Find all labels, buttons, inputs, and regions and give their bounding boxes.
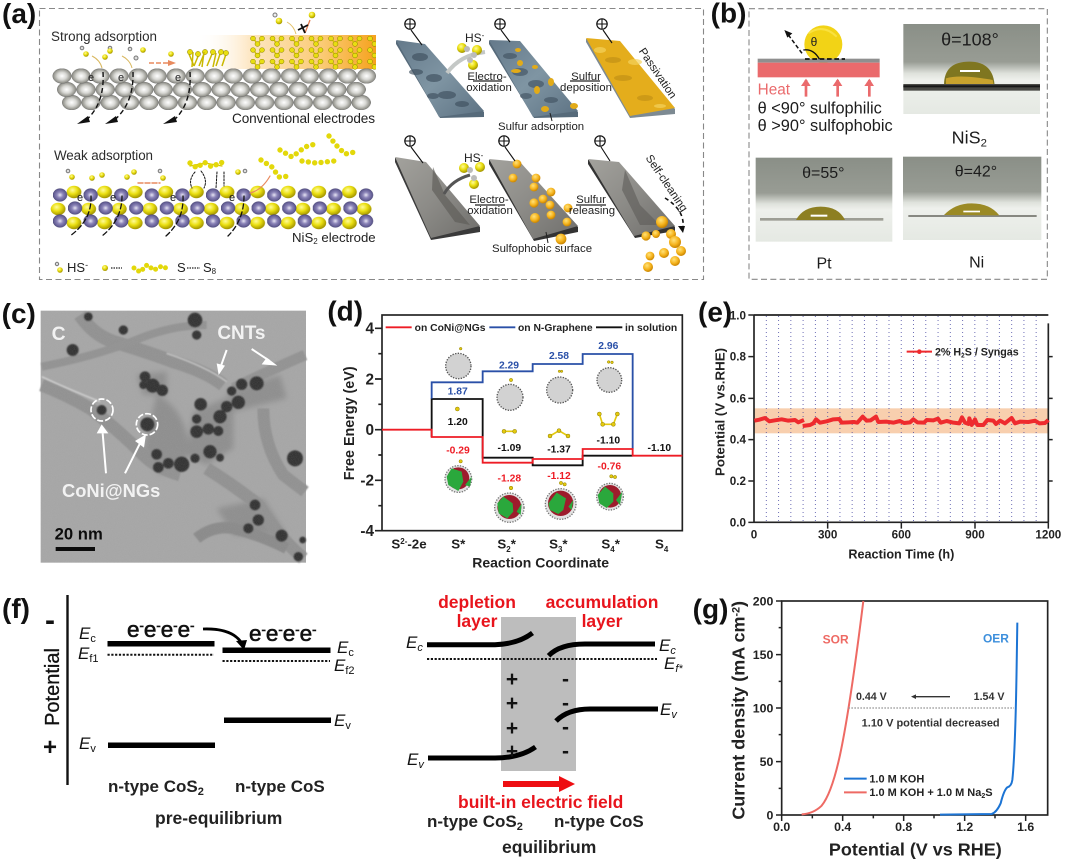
labels bottom row of plates <box>464 151 690 255</box>
axes e: 300 <box>818 528 837 541</box>
adsorbed HS- and electron paths, conventional: e <box>175 72 181 84</box>
x axis labels d: 4 <box>664 545 669 554</box>
legend g: 1.0 M KOH + 1.0 M Na <box>869 787 981 799</box>
y axis title g: Current density (mA cm <box>729 616 749 820</box>
labels bottom row of plates: Electro- <box>469 194 509 206</box>
legend g: 1.0 M KOH <box>869 773 924 785</box>
x axis title e: Reaction Time (h) <box>848 548 954 562</box>
red energy values <box>446 446 621 484</box>
HS- adsorbing and blocked <box>273 12 315 34</box>
panel label (f): (f) <box>2 593 30 624</box>
red layer labels: accumulation <box>546 592 658 612</box>
x axis labels d: S <box>655 537 664 552</box>
level labels right diagram: E <box>659 636 670 655</box>
electrons left and right: - <box>173 618 178 633</box>
potential annotation: 1.54 V <box>974 691 1005 703</box>
potential annotation <box>848 691 1014 729</box>
space charges: - <box>562 716 569 739</box>
scale bar: 20 nm <box>55 524 103 543</box>
material labels left: n-type CoS <box>108 777 198 796</box>
level labels left diagram: E <box>337 638 348 657</box>
electrons left and right: e <box>249 621 262 646</box>
legend a: 8 <box>212 267 217 276</box>
panel label (c): (c) <box>2 298 36 329</box>
level labels left diagram <box>78 624 355 755</box>
axes g <box>753 595 1048 834</box>
built-in field label: built-in electric field <box>458 792 623 812</box>
black energy values: -1.10 <box>648 443 671 454</box>
sulfur chains released <box>66 136 355 236</box>
axes d: -4 <box>360 523 374 540</box>
nanoparticle dashed circles <box>91 399 158 435</box>
axes g: 0.8 <box>895 820 912 834</box>
electrons left and right: - <box>190 618 194 633</box>
blue energy values: 2.58 <box>549 351 569 362</box>
axes d: 0 <box>365 422 374 439</box>
panel: (d) free energy diagram <box>327 296 682 570</box>
space charges: + <box>506 668 518 691</box>
potential axis: - <box>45 604 55 637</box>
space charges <box>506 668 569 763</box>
labels top row of plates: Sulfur <box>571 71 601 83</box>
built-in field arrow <box>503 776 575 792</box>
sulfophilic/sulfophobic definitions: θ <90° sulfophilic <box>758 99 882 117</box>
axes g: 0.4 <box>834 820 851 834</box>
electrons left and right: e <box>300 621 312 646</box>
legend a: S <box>177 260 186 275</box>
sulfur chains released: e <box>170 192 176 204</box>
label: NiS2 electrode: electrode <box>318 230 376 245</box>
axes e: 0.4 <box>730 434 747 447</box>
x axis labels d: 3 <box>558 545 563 554</box>
material labels right: 2 <box>517 821 523 833</box>
adsorbed sulfur atoms and chains <box>455 347 619 490</box>
axes g: 1.2 <box>956 820 973 834</box>
x axis labels d: S <box>601 537 610 552</box>
x axis labels d: S <box>391 537 400 552</box>
level labels left diagram: E <box>79 734 90 753</box>
legend a: HS <box>67 260 85 275</box>
axes e: 900 <box>965 528 985 541</box>
x axis labels d: * <box>511 537 517 552</box>
electrons left and right: e <box>178 617 190 642</box>
axes e: 600 <box>892 528 911 541</box>
electrons left and right <box>127 617 316 646</box>
stability band <box>754 408 1048 433</box>
level labels right diagram: v <box>418 759 425 771</box>
legend e: S / Syngas <box>965 347 1019 359</box>
electrons left and right: - <box>278 622 283 637</box>
label C: C <box>52 324 66 345</box>
red energy values: -1.28 <box>498 473 521 484</box>
axes g: 150 <box>753 648 773 662</box>
legend e: 2 <box>961 353 965 360</box>
electrons left and right: e <box>161 617 173 642</box>
axes g: 0.0 <box>773 820 790 834</box>
NiS2 electrode atoms <box>50 186 374 230</box>
axes e: 0.8 <box>730 351 747 364</box>
panel: (a) adsorption comparison <box>2 0 704 280</box>
caption pre-equilibrium: pre-equilibrium <box>155 808 282 828</box>
SOR curve <box>802 601 863 814</box>
black energy values: 1.20 <box>448 417 468 428</box>
panel: (b) contact angle <box>711 0 1047 279</box>
Fermi level dotted <box>427 658 657 660</box>
x axis labels d: * <box>615 537 621 552</box>
panel: (c) TEM image <box>2 298 306 563</box>
axes d: 2 <box>365 371 374 388</box>
metal atom rows: conventional electrode <box>52 68 376 110</box>
axes g: 100 <box>753 701 773 715</box>
level labels left diagram: f2 <box>345 665 355 677</box>
labels bottom row of plates: HS <box>464 151 481 165</box>
caption equilibrium: equilibrium <box>502 837 596 857</box>
label Pt: Pt <box>816 256 832 273</box>
level labels left diagram: E <box>78 644 89 663</box>
panel label (g): (g) <box>693 593 728 624</box>
legend g: S <box>985 787 993 799</box>
potential trace <box>754 417 1048 426</box>
space charges: + <box>506 692 518 715</box>
adsorbed HS- and electron paths, conventional <box>77 46 216 124</box>
heading: strong adsorption: Strong adsorption <box>51 29 157 44</box>
axes e: 1.0 <box>730 309 746 322</box>
legend e <box>907 347 1019 360</box>
label NiS2: 2 <box>981 138 987 150</box>
material labels right <box>427 812 644 833</box>
x axis labels d: S* <box>451 537 466 552</box>
label CoNi@NGs with arrows: CoNi@NGs <box>62 480 160 501</box>
legend g <box>844 773 993 800</box>
panel label (e): (e) <box>698 296 732 327</box>
red energy values: -0.29 <box>446 446 470 457</box>
space charges: - <box>562 692 569 715</box>
heated droplet diagram: θ <box>811 35 818 49</box>
labels bottom row of plates: oxidation <box>467 205 513 217</box>
legend d: in solution <box>625 323 677 334</box>
orange sulfur passivation layer <box>187 35 376 70</box>
x axis title d: Reaction Coordinate <box>472 554 609 570</box>
label CNTs with arrows: CNTs <box>217 323 266 344</box>
photo: NiS2 droplet: θ=108° <box>941 29 999 49</box>
label Ni: Ni <box>969 254 984 271</box>
y axis title d: Free Energy (eV) <box>342 366 358 480</box>
red energy values: -0.76 <box>598 462 621 473</box>
level labels left diagram: v <box>345 720 351 732</box>
CoNi graphene cluster models <box>445 466 623 522</box>
labels bottom row of plates: Sulfur <box>576 194 606 206</box>
y axis title g: ) <box>729 601 749 607</box>
labels top row of plates: HS <box>465 31 482 45</box>
level labels left diagram: E <box>334 711 345 730</box>
energy step lines <box>382 354 682 465</box>
black energy values: -1.10 <box>597 435 620 446</box>
material labels left: n-type CoS <box>235 777 325 796</box>
legend g: 2 <box>981 793 985 800</box>
red energy values: -1.12 <box>547 471 571 482</box>
potential axis <box>42 595 68 785</box>
OER curve <box>940 623 1017 815</box>
label CNTs with arrows <box>217 323 277 375</box>
legend d <box>386 323 677 334</box>
electrons left and right: e <box>127 617 140 642</box>
labels top row of plates: deposition <box>560 82 612 94</box>
labels bottom row of plates: releasing <box>569 205 615 217</box>
sulfophilic/sulfophobic definitions: θ >90° sulfophobic <box>758 117 893 135</box>
sulfophilic/sulfophobic definitions <box>758 99 893 135</box>
axes d: -2 <box>360 473 374 490</box>
photo: Ni droplet: θ=42° <box>955 164 997 181</box>
panel: (g) polarization curves <box>693 593 1048 860</box>
label: conventional electrodes: Conventional electrodes <box>232 111 375 126</box>
sulfur chains released: e <box>229 192 235 204</box>
labels bottom row of plates: Self-cleaning <box>643 153 690 214</box>
potential axis: + <box>43 734 57 761</box>
photo: Pt droplet <box>756 158 892 242</box>
blue energy values <box>448 341 619 397</box>
level labels right diagram: E <box>660 700 671 719</box>
photo: NiS2 droplet <box>903 24 1040 114</box>
legend a: - <box>85 260 88 270</box>
level labels left diagram: E <box>79 624 90 643</box>
labels top row of plates: - <box>482 31 485 40</box>
pre-equilibrium levels <box>108 629 331 748</box>
level labels left diagram: c <box>90 633 96 645</box>
panel: (f) band diagrams <box>2 592 683 857</box>
label CoNi@NGs with arrows <box>62 424 160 501</box>
x axis labels d: 4 <box>610 545 615 554</box>
bent bands <box>427 633 658 758</box>
label: NiS2 electrode: NiS <box>292 230 313 245</box>
axes e <box>730 309 1061 541</box>
material labels right: n-type CoS <box>554 812 644 831</box>
level labels right diagram: E <box>664 654 675 673</box>
x axis labels d: S <box>497 537 506 552</box>
axes g: 1.6 <box>1017 820 1034 834</box>
space charges: + <box>506 740 518 763</box>
legend a <box>55 260 217 276</box>
labels top row of plates: Sulfur adsorption <box>498 121 584 133</box>
red layer labels: depletion <box>438 592 516 612</box>
level labels right diagram: c <box>417 642 423 654</box>
blue energy values: 2.96 <box>598 341 619 352</box>
dashed frame a <box>40 8 704 280</box>
axes g: 50 <box>760 755 773 769</box>
x axis labels d: -2e <box>407 537 427 552</box>
labels bottom row of plates: Sulfophobic surface <box>492 243 592 255</box>
axes e: 0.0 <box>730 516 746 529</box>
3D plates bottom row: sulfophobic surface and self-cleaning <box>395 136 686 272</box>
legend a: S <box>203 260 212 275</box>
level labels left diagram: c <box>348 647 354 659</box>
axes g: 200 <box>753 595 773 609</box>
y axis title e: Potential (V vs.RHE) <box>713 348 728 476</box>
TEM micrograph <box>41 311 306 563</box>
adsorbed HS- and electron paths, conventional: e <box>88 72 94 84</box>
y axis title g: -2 <box>730 607 742 616</box>
black energy values: -1.09 <box>498 443 521 454</box>
potential annotation: 1.10 V potential decreased <box>862 717 1000 729</box>
level labels right diagram: E <box>406 633 417 652</box>
electrons left and right: - <box>295 622 300 637</box>
x axis labels d: 2 <box>506 545 511 554</box>
electrons left and right: - <box>312 622 316 637</box>
axes e: 1200 <box>1035 528 1061 541</box>
level labels left diagram: E <box>334 656 345 675</box>
level labels right diagram: E <box>407 750 418 769</box>
equilibrium junction region <box>501 617 576 771</box>
material labels left: 2 <box>198 786 204 798</box>
label SOR: SOR <box>823 632 849 646</box>
heated droplet diagram <box>758 25 880 97</box>
material labels left <box>108 777 325 798</box>
level labels left diagram: v <box>90 743 96 755</box>
heading: weak adsorption: Weak adsorption <box>54 148 153 163</box>
level labels left diagram: f1 <box>89 653 99 665</box>
blue energy values: 1.87 <box>448 386 468 397</box>
black energy values: -1.37 <box>547 445 571 456</box>
blue energy values: 2.29 <box>499 360 519 371</box>
red layer labels: layer <box>457 611 498 631</box>
label: NiS2 electrode: 2 <box>313 237 318 246</box>
3D plates top row: electrooxidation, deposition, passivation <box>396 19 675 118</box>
dotted vertical lines <box>766 316 1036 522</box>
axes g: 0 <box>766 808 773 822</box>
level labels right diagram: c <box>670 645 676 657</box>
red layer labels: layer <box>582 611 623 631</box>
dashed frame b <box>749 9 1047 279</box>
legend e: 2% H <box>935 347 961 359</box>
x axis labels d: S <box>549 537 558 552</box>
x axis labels d <box>391 537 669 554</box>
electrons left and right: - <box>156 618 161 633</box>
panel label (d): (d) <box>327 296 363 327</box>
axes d: 4 <box>365 321 374 338</box>
sulfur chains released: e <box>77 192 83 204</box>
electrons left and right: e <box>144 617 156 642</box>
level labels right diagram <box>406 633 683 771</box>
electrons left and right: e <box>283 621 295 646</box>
axes e: 0 <box>751 528 757 541</box>
photo: Pt droplet: θ=55° <box>802 165 845 182</box>
axes d <box>360 315 682 540</box>
x axis labels d: * <box>562 537 568 552</box>
graphene ball models <box>446 353 622 410</box>
legend d: on N-Graphene <box>518 323 593 334</box>
legend d: on CoNi@NGs <box>415 323 486 334</box>
level labels right diagram: f* <box>675 663 683 675</box>
axes e: 0.6 <box>730 392 747 405</box>
potential axis: Potential <box>42 648 64 726</box>
electrons left and right: e <box>266 621 278 646</box>
space charges: - <box>562 668 569 691</box>
heat label: Heat <box>758 82 791 99</box>
adsorbed HS- and electron paths, conventional: e <box>118 72 124 84</box>
axes e: 0.2 <box>730 475 747 488</box>
labels top row of plates: Electro- <box>467 71 507 83</box>
electrons left and right: - <box>140 618 144 633</box>
x axis title g: Potential (V vs RHE) <box>829 840 1002 860</box>
x axis labels d: 2- <box>400 537 408 546</box>
sulfur chains released: e <box>110 192 116 204</box>
labels top row of plates <box>465 31 678 133</box>
label OER: OER <box>983 631 1009 645</box>
space charges: + <box>506 717 518 740</box>
panel: (e) stability chart <box>698 296 1061 562</box>
labels top row of plates: Passivation <box>636 46 678 101</box>
red layer labels <box>438 592 658 631</box>
potential annotation: 0.44 V <box>856 691 888 703</box>
labels top row of plates: oxidation <box>466 82 512 94</box>
photo: Ni droplet <box>903 157 1041 240</box>
space charges: - <box>562 740 569 763</box>
material labels right: n-type CoS <box>427 812 517 831</box>
electrons left and right: - <box>262 622 266 637</box>
black energy values <box>448 417 671 456</box>
labels bottom row of plates: - <box>481 151 484 160</box>
level labels right diagram: v <box>671 709 678 721</box>
label NiS2: NiS <box>952 127 981 147</box>
